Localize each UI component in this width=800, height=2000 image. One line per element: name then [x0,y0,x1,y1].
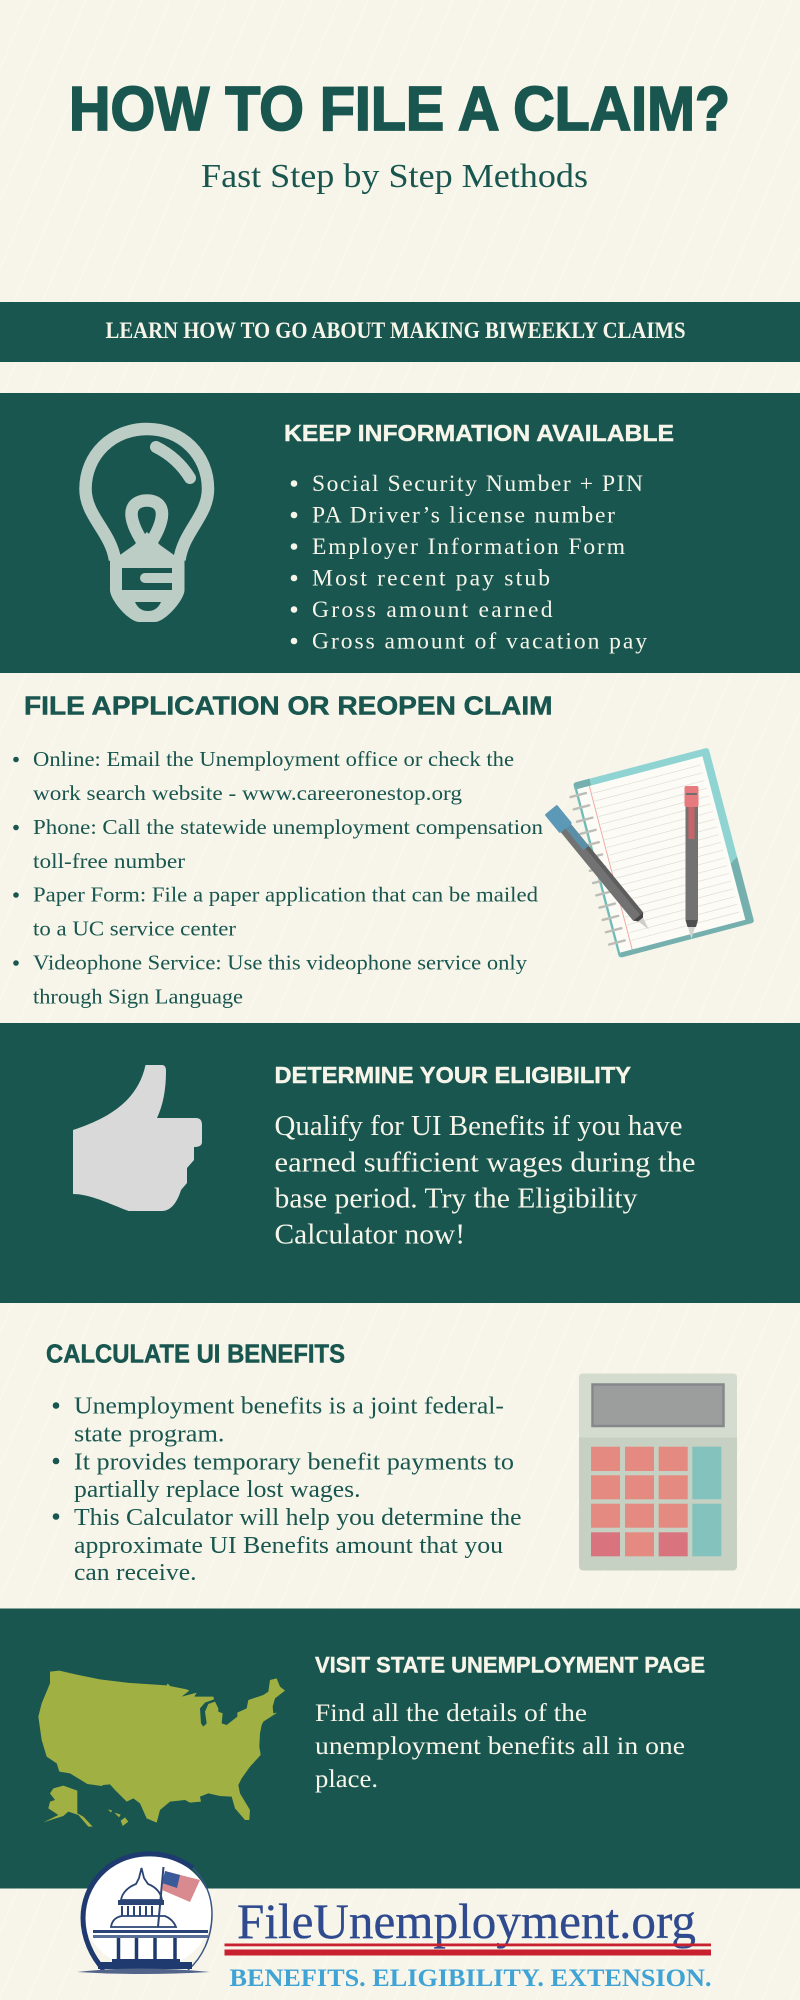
checklist: Employer Information Form [312,534,625,560]
subtitle: Fast Step by Step Methods [201,158,588,195]
checklist: Gross amount earned [312,597,553,623]
heading: KEEP INFORMATION AVAILABLE [284,420,674,446]
list: UI benefit facts: This Calculator will help you determine the [74,1505,522,1531]
icon: map of the United States [38,1671,285,1827]
checklist: Gross amount of vacation pay [312,628,647,654]
checklist: PA Driver’s license number [312,502,615,528]
list: UI benefit facts: approximate UI Benefits amount that you [74,1533,503,1559]
list: filing methods: through Sign Language [33,984,243,1008]
list: filing methods: toll-free number [33,849,185,873]
icon: calculator [579,1374,737,1570]
wordmark: FileUnemployment.org [237,1893,696,1949]
logo: FileUnemployment.org [77,1854,712,1992]
heading: DETERMINE YOUR ELIGIBILITY [274,1062,631,1088]
body text: unemployment benefits all in one [315,1733,685,1760]
panel: determine your eligibility [0,1023,800,1303]
heading: VISIT STATE UNEMPLOYMENT PAGE [315,1652,705,1678]
checklist: Social Security Number + PIN [312,471,643,497]
checklist: Most recent pay stub [312,566,550,592]
panel: keep information available [0,393,800,673]
body text [274,1111,696,1250]
list: UI benefit facts: state program. [74,1422,224,1448]
icon: notebook and pens [545,747,754,960]
icon: light bulb [86,429,208,622]
body text [315,1700,685,1793]
list: UI benefit facts: partially replace lost wages. [74,1477,360,1503]
notebook [567,747,754,960]
list: filing methods [13,747,544,1008]
logo emblem: capitol and flag [77,1854,212,1974]
panel: visit state unemployment page [0,1608,800,1888]
list: filing methods: Paper Form: File a paper application that can be mailed [33,882,539,906]
left pen [545,805,655,935]
list: UI benefit facts: It provides temporary benefit payments to [74,1450,514,1476]
body text: place. [315,1766,378,1793]
list: UI benefit facts: can receive. [74,1560,196,1586]
body text: Qualify for UI Benefits if you have [274,1111,682,1142]
list: filing methods: Online: Email the Unemployment office or check the [33,747,514,771]
body text: earned sufficient wages during the [274,1148,696,1178]
body text: Find all the details of the [315,1700,587,1727]
list: filing methods: Videophone Service: Use this videophone service only [33,950,528,974]
heading: file application: FILE APPLICATION OR REOPEN CLAIM [24,690,552,720]
title: HOW TO FILE A CLAIM? [69,75,730,144]
tagline: BENEFITS. ELIGIBILITY. EXTENSION. [230,1965,712,1992]
banner [0,302,800,362]
list: filing methods: to a UC service center [33,916,236,940]
banner: LEARN HOW TO GO ABOUT MAKING BIWEEKLY CLAIMS [106,318,686,343]
list: filing methods: work search website - www.careeronestop.org [33,781,463,805]
checklist [291,471,647,654]
list: filing methods: Phone: Call the statewide unemployment compensation [33,815,544,839]
heading: calculate UI benefits: CALCULATE UI BENEFITS [46,1340,345,1368]
body text: Calculator now! [274,1220,465,1250]
body text: base period. Try the Eligibility [274,1184,638,1214]
list: UI benefit facts [53,1394,521,1586]
right pen [684,786,698,939]
list: UI benefit facts: Unemployment benefits is a joint federal- [74,1394,504,1420]
icon: thumbs up [73,1065,202,1211]
